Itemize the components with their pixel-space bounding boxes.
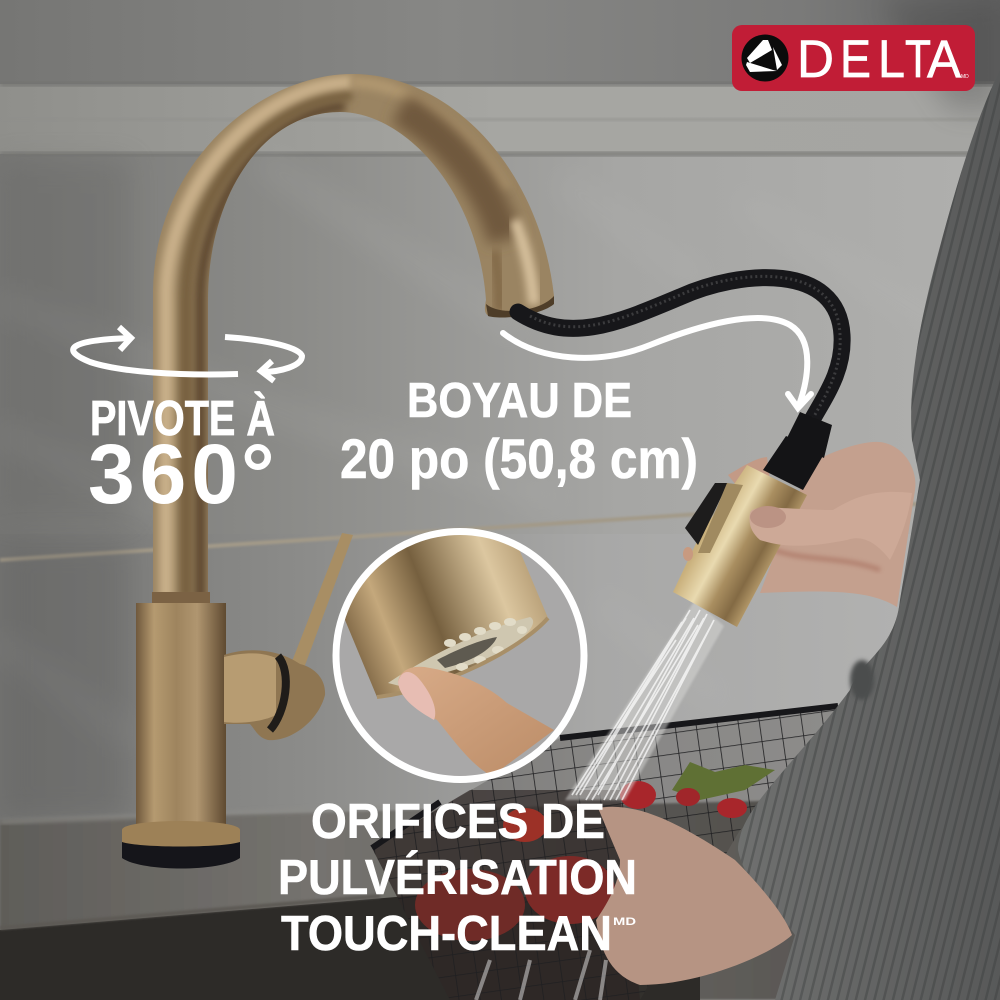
text: touch-clean callout <box>278 795 637 961</box>
faucet lever handle <box>291 533 353 668</box>
faucet handle hub <box>224 650 325 740</box>
text: hose length callout: 20 po (50,8 cm) <box>340 427 698 490</box>
countertop <box>0 800 800 1000</box>
hand holding sprayer: back of hand <box>728 442 915 607</box>
finger behind sprayer <box>683 547 693 561</box>
circle ring <box>336 532 584 780</box>
text: swivel callout <box>88 392 275 521</box>
faucet <box>122 60 570 868</box>
icon: hose length arrow <box>503 318 811 408</box>
logo: Delta <box>732 25 975 91</box>
spout outlet <box>486 296 554 318</box>
text: swivel callout: ° <box>241 427 275 521</box>
strawberries <box>415 762 775 941</box>
text: swivel callout: PIVOTE À <box>90 392 275 446</box>
nozzle beads <box>444 618 527 671</box>
sprayer connector <box>763 412 832 490</box>
text: touch-clean callout: PULVÉRISATION <box>278 851 637 905</box>
sprayer button <box>685 483 728 545</box>
logo: Delta: MD <box>961 74 969 80</box>
logo wordmark: A <box>927 30 962 89</box>
logo mark <box>742 34 788 82</box>
nozzle face <box>388 617 533 686</box>
logo wordmark: L <box>878 30 905 89</box>
basket with strawberries <box>350 700 850 1000</box>
text: touch-clean callout: TOUCH-CLEAN <box>281 907 612 961</box>
text: hose length callout: BOYAU DE <box>407 374 632 428</box>
faucet collar <box>152 592 210 604</box>
logo wordmark: E <box>840 30 871 89</box>
fingernail <box>398 672 435 720</box>
logo wordmark: D <box>797 30 834 89</box>
hand holding basket <box>596 807 792 985</box>
sprayer head close-up <box>345 535 548 697</box>
sprayer body <box>673 465 807 627</box>
water spray <box>476 600 724 1000</box>
icon: rotation arrows <box>73 327 302 381</box>
faucet black base <box>122 842 240 868</box>
faucet body <box>136 603 226 828</box>
hand holding sprayer: thumb <box>749 492 912 560</box>
text: swivel callout: 360 <box>88 427 238 521</box>
logo wordmark: T <box>905 30 931 89</box>
sleeve sweater <box>738 70 1000 1000</box>
logo wordmark <box>797 30 962 89</box>
sprayer button cover <box>698 483 743 553</box>
faucet spout <box>153 74 554 592</box>
faucet base ring <box>122 821 240 850</box>
finger <box>398 667 554 776</box>
pull-down sprayer <box>518 276 842 627</box>
hose <box>518 278 842 420</box>
text: hose length callout <box>340 374 698 490</box>
text: touch-clean callout: ORIFICES DE <box>311 795 605 849</box>
rim <box>377 618 548 697</box>
inset circle: touch-clean sprayer face <box>332 528 588 783</box>
text: touch-clean callout: MD <box>613 916 636 928</box>
